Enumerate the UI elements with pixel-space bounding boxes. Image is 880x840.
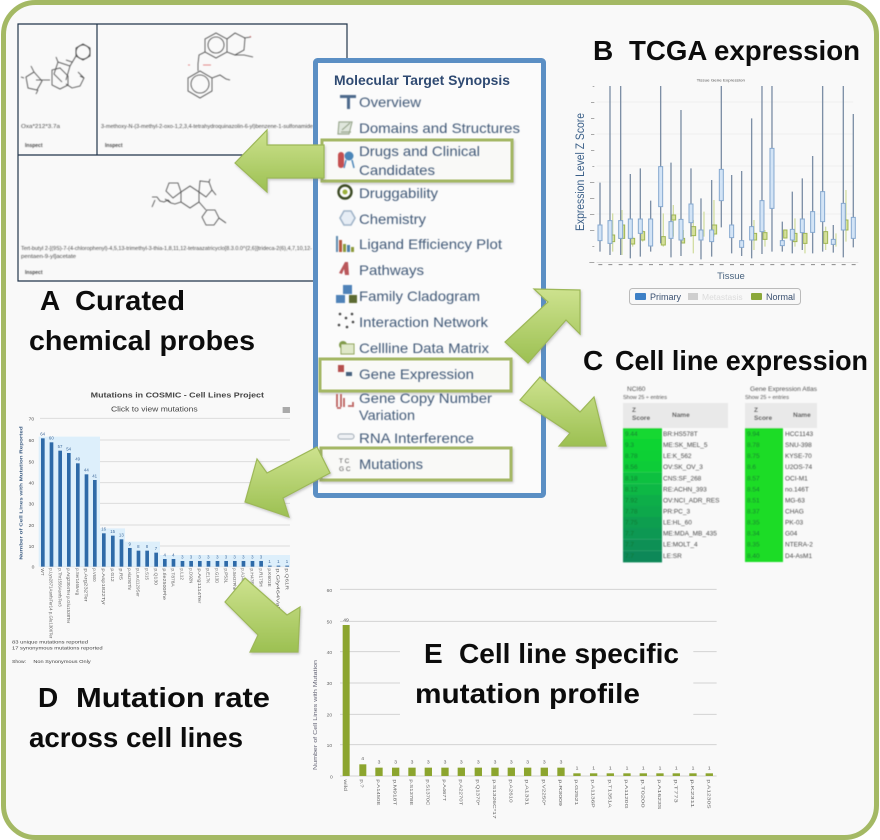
table two scores: 8.40: [747, 553, 760, 560]
label: D mutation rate across cell lines: D: [38, 682, 58, 713]
table one rows: CNS:SF_268: [663, 476, 702, 482]
table two header: Score: [754, 415, 772, 422]
x labels: p.A467T: [441, 779, 447, 801]
grid lines: [340, 589, 717, 776]
y axis labels: 60: [29, 438, 34, 444]
table one rows: ME:MDA_MB_435: [663, 530, 717, 538]
menu items: Family Cladogram: [359, 288, 480, 304]
table two score column: [745, 428, 783, 562]
chart title: Mutations in COSMIC - Cell Lines Project: [91, 391, 265, 400]
menu items: Domains and Structures: [359, 120, 520, 136]
icon: druggability: [338, 186, 352, 198]
table one rows: LE:HL_60: [663, 520, 692, 526]
table two scores: 9.94: [747, 431, 760, 438]
primary boxes: [598, 148, 855, 247]
bar values: 13: [119, 533, 124, 538]
label: A curated chemical probes: chemical probes: [29, 325, 255, 356]
y axis labels: 0: [330, 774, 333, 780]
bar values: 3: [560, 759, 563, 765]
bar values: 16: [101, 527, 107, 532]
icon: mutations: T C: [339, 458, 350, 465]
bar values: 8: [137, 544, 140, 549]
x labels: [39, 568, 289, 639]
primary whiskers: [600, 86, 853, 259]
highlight: mutations: [321, 448, 511, 480]
molecule three: [152, 179, 226, 225]
table two scores: 8.57: [747, 476, 760, 482]
x labels: p.Q61R: [283, 568, 289, 590]
menu items: Variation: [359, 407, 415, 423]
x labels: p.A2270T: [457, 779, 463, 805]
label: E cell line specific mutation profile: E: [424, 638, 443, 669]
bar values: 57: [58, 444, 63, 449]
label: E cell line specific mutation profile: mutation profile: [415, 678, 640, 709]
x labels: p.S1370C: [424, 779, 430, 806]
table one scores: 8.56: [625, 464, 638, 471]
bar values: 1: [592, 765, 595, 771]
table one header: Name: [672, 412, 690, 419]
table one heading: NCI60: [627, 386, 646, 393]
menu items: RNA Interference: [359, 430, 474, 446]
bar values: 41: [92, 473, 98, 478]
mutation counts: 17 synonymous mutations reported: [12, 646, 103, 652]
x labels: p.A1230S: [705, 779, 711, 810]
x labels: p.E17K: [205, 568, 211, 584]
table two controls: Show 25 ÷ entries: [745, 395, 789, 401]
menu items: [359, 94, 520, 472]
y axis title: Number of Cell Lines with Mutation Reported: [18, 426, 24, 560]
table one controls: Show 25 ÷ entries: [623, 395, 667, 401]
bar values: 1: [576, 765, 579, 771]
y axis labels: 10: [327, 743, 332, 749]
bar values: 54: [66, 446, 72, 451]
table two rows: D4-AsM1: [785, 553, 812, 560]
bar values: 49: [343, 617, 349, 623]
table one scores: 7.7: [625, 542, 634, 548]
icon: domains: [338, 122, 352, 134]
y axis labels: 50: [29, 460, 34, 466]
x labels: p.M918T: [392, 779, 398, 805]
mutation counts: 83 unique mutations reported: [12, 640, 88, 646]
x labels: p.V600: [91, 568, 97, 582]
bars: [343, 625, 713, 776]
table one scores: 8.18: [625, 476, 638, 482]
label: A curated chemical probes: A: [40, 285, 60, 316]
bar values: 3: [444, 759, 447, 765]
bar values: 3: [394, 759, 397, 765]
table two rows: SNU-398: [785, 442, 812, 449]
table one rows: OV:SK_OV_3: [663, 464, 703, 471]
menu box: [316, 60, 544, 496]
x labels: p.G13D: [214, 568, 220, 584]
label: C cell line expression: Cell line expression: [615, 345, 868, 376]
icon: gene copy number: [337, 394, 353, 408]
table one header: Score: [632, 415, 650, 422]
highlight: gene expression: [320, 359, 511, 391]
bar values: 3: [251, 554, 254, 559]
x labels: p.Q1370*: [474, 779, 480, 805]
x labels: p.Leu1129Ser: [135, 568, 141, 597]
x labels: p.R175H: [257, 568, 263, 587]
icon: ligand plot: [336, 236, 354, 252]
highlighted band: [39, 437, 290, 567]
bar values: 4: [172, 552, 175, 557]
x labels: p.Arg1114Ter: [196, 568, 202, 604]
menu icons: [336, 95, 357, 473]
icon: gene expression: [338, 365, 352, 376]
y axis labels: [29, 416, 35, 571]
table one scores: 8.12: [625, 486, 638, 494]
bar values: 1: [642, 765, 645, 771]
icon: chemistry: [340, 211, 355, 225]
bar values: 3: [216, 554, 219, 559]
x labels: WT: [39, 568, 45, 576]
grid lines: [40, 418, 290, 567]
compound captions: Inspect: [25, 270, 43, 276]
x labels: p.Lys2871AsnfsTer14 p.Glu1306Ter: [48, 568, 54, 639]
grid and axis: [597, 102, 858, 263]
x labels: p.K2311: [689, 779, 695, 808]
x labels: [342, 779, 711, 819]
table two rows: no.146T: [785, 486, 809, 494]
x labels: p.A146T: [240, 568, 246, 585]
bar values: 1: [609, 765, 612, 771]
table one rows: ME:SK_MEL_5: [663, 442, 708, 449]
x labels: p.Q130: [152, 568, 158, 585]
y axis labels: 30: [327, 681, 332, 687]
menu items: Gene Copy Number: [359, 390, 492, 406]
table one rows: BR:HS578T: [663, 431, 698, 438]
x labels: p.?: [359, 779, 365, 788]
x labels: wild: [342, 779, 348, 791]
panel borders: [18, 24, 347, 281]
molecule two: [188, 33, 253, 98]
table two header: [745, 403, 817, 428]
bar values: 3: [198, 554, 201, 559]
arrow: to cell line expression: [520, 377, 606, 446]
x labels: p.S1326C*17: [491, 779, 497, 819]
bar values: 3: [411, 759, 414, 765]
menu items: Ligand Efficiency Plot: [359, 236, 502, 252]
menu items: Cellline Data Matrix: [359, 340, 489, 356]
bar values: 1: [286, 559, 289, 564]
x labels: p.R5: [118, 568, 124, 580]
table two rows: OCI-M1: [785, 476, 808, 482]
compound captions: 3-methoxy-N-(3-methyl-2-oxo-1,2,3,4-tetrahydroquinazolin-6-yl)benzene-1-sulfonamide: [101, 124, 313, 130]
bar values: 3: [181, 554, 184, 559]
y axis labels: 40: [327, 650, 332, 656]
table two rows: PK-03: [785, 520, 803, 526]
bar values: 4: [163, 552, 166, 557]
x labels: p.R3009: [557, 779, 563, 806]
table one scores: 7.75: [625, 520, 638, 526]
panel: curated chemical probes: [18, 24, 347, 281]
table two rows: HCC1143: [785, 431, 813, 438]
table one scores: 7.7: [625, 553, 634, 560]
table two scores: 8.54: [747, 486, 760, 494]
y axis labels: 60: [327, 588, 332, 594]
x labels: p.S15: [143, 568, 149, 580]
label: D mutation rate across cell lines: Mutation rate: [76, 682, 270, 713]
compound captions: Tert-butyl 2-[(9S)-7-(4-chlorophenyl)-4,5,13-trimethyl-3-thia-1,8,11,12-tetraazatricyclo[8.3.0.0^{2,6}]trideca-2(6),4,7,10,12-: [21, 246, 312, 252]
table two rows: KYSE-70: [785, 453, 812, 460]
icon: overview: [340, 95, 356, 109]
x labels: p.L12: [179, 568, 185, 580]
menu items: Interaction Network: [359, 314, 489, 330]
highlight: drugs and clinical candidates: [322, 140, 512, 181]
bar values: 9: [128, 541, 131, 546]
menu items: Candidates: [359, 162, 435, 178]
x labels: p.V2250*: [540, 779, 546, 805]
bar values: 3: [510, 759, 513, 765]
menu items: Chemistry: [359, 211, 426, 227]
x labels: p.Arg2304Ter p.Glu1538Ter: [65, 568, 71, 624]
y axis labels: 10: [29, 544, 34, 550]
menu items: Drugs and Clinical: [359, 143, 480, 159]
table one rows: LE:SR: [663, 553, 682, 560]
label: C cell line expression: C: [583, 345, 603, 376]
bar values: 49: [75, 457, 81, 462]
label: B TCGA expression: TCGA expression: [629, 35, 860, 66]
legend: [630, 288, 800, 304]
chart subtitle: Click to view mutations: [111, 406, 198, 413]
icon: mutations: [339, 458, 351, 473]
chart title: Tissue Gene Expression: [697, 78, 745, 83]
menu items: Pathways: [359, 262, 424, 278]
y axis labels: 20: [327, 712, 332, 718]
x labels: p.Ala290Thr: [126, 568, 132, 590]
table two scores: 8.37: [747, 508, 760, 516]
bar values: 1: [708, 765, 711, 771]
x labels: p.Ser1465Arg: [74, 568, 80, 595]
x labels: p.Thr1556AsnfsTer3: [56, 568, 62, 607]
icon: cellline matrix: [339, 341, 354, 354]
x labels: p.T0200: [639, 779, 645, 808]
bar values: 4: [361, 756, 364, 762]
bars: [41, 438, 289, 567]
bar values: 3: [260, 554, 263, 559]
x labels: p.Gly464Val: [275, 568, 281, 608]
x labels: p.T1351A: [606, 779, 612, 809]
bar values: 3: [427, 759, 430, 765]
x labels: p.Ser37Phe: [231, 568, 237, 590]
compound captions: pentaen-9-yl]acetate: [21, 254, 76, 260]
table one rows: PR:PC_3: [663, 508, 690, 516]
label: A curated chemical probes: [29, 285, 255, 356]
chart: cell line specific mutation profile: [327, 588, 717, 819]
bar values: 1: [692, 765, 695, 771]
table two scores: 8.35: [747, 542, 760, 548]
x labels: p.D92N: [187, 568, 193, 584]
bar values: 3: [460, 759, 463, 765]
icon: pathways: [339, 262, 349, 275]
x labels: p.T773: [672, 779, 678, 803]
table one score column: [623, 428, 662, 562]
table one rows: LE:MOLT_4: [663, 542, 698, 548]
table two rows: U2OS-74: [785, 464, 812, 471]
menu items: Overview: [359, 94, 422, 110]
bar values: 1: [675, 765, 678, 771]
x labels: p.T878A: [170, 568, 176, 587]
icon: mutations: G C: [339, 466, 351, 473]
table two scores: 8.6: [747, 464, 756, 471]
x labels: p.Ile2500Phe: [161, 568, 167, 600]
table two header: Name: [793, 412, 811, 419]
chart: TCGA expression boxplot: [589, 78, 858, 265]
bar values: 3: [207, 554, 210, 559]
bar values: 3: [190, 554, 193, 559]
compound captions: [21, 124, 313, 276]
x labels: p.A1331: [524, 779, 530, 806]
mutation counts: Show:: [12, 659, 26, 665]
mutation counts: Non Synonymous Only: [33, 659, 91, 665]
arrow: to TCGA expression: [505, 289, 580, 363]
x labels: p.P53L: [222, 568, 228, 584]
table two rows: [785, 431, 813, 560]
icon: rna interference: [338, 434, 354, 439]
label: E cell line specific mutation profile: [415, 638, 679, 709]
bar values: 1: [268, 559, 271, 564]
x labels: p.S1378E: [408, 779, 414, 806]
bar values: 1: [626, 765, 629, 771]
label: B TCGA expression: B: [593, 35, 613, 66]
table two scores: 8.34: [747, 530, 760, 538]
table one header: [623, 403, 728, 428]
arrow: to mutation rate: [245, 447, 330, 517]
bar values: 7: [155, 546, 158, 551]
molecule one: [21, 44, 90, 94]
x labels: p.A2610: [507, 779, 513, 803]
table two rows: G04: [785, 530, 798, 538]
y-axis label: Expression Level Z Score: [575, 113, 587, 231]
mutation counts: [12, 640, 103, 665]
x tick labels: [598, 263, 856, 266]
x labels: p.G12: [109, 568, 115, 582]
table two scores: 8.78: [747, 442, 760, 449]
table two rows: CHAG: [785, 508, 804, 516]
legend: Metastasis: [702, 292, 743, 302]
bar values: 64: [40, 432, 46, 437]
label: D mutation rate across cell lines: across cell lines: [29, 722, 243, 753]
bar values: 3: [526, 759, 529, 765]
table one header: Z: [632, 407, 636, 414]
table two scores: 8.75: [747, 453, 760, 460]
icon: interaction network: [338, 313, 354, 328]
x labels: p.Asp1822Tyr: [100, 568, 106, 605]
bar values: 15: [110, 529, 116, 534]
table two scores: [747, 431, 760, 560]
menu items: Gene Expression: [359, 366, 474, 382]
y axis labels: 20: [29, 523, 34, 529]
table one scores: 7.7: [625, 530, 634, 538]
bar values: 44: [84, 468, 89, 473]
table two rows: MG-63: [785, 498, 805, 504]
table one scores: 7.78: [625, 508, 638, 516]
label: E cell line specific mutation profile: Cell line specific: [459, 638, 679, 669]
table one rows: OV:NCI_ADR_RES: [663, 498, 720, 504]
x labels: p.A1120G: [623, 779, 629, 809]
y axis labels: 40: [29, 481, 34, 487]
table one rows: [663, 431, 720, 560]
table two scores: 8.35: [747, 520, 760, 526]
icon: family cladogram: [336, 285, 357, 303]
y axis labels: 50: [327, 619, 332, 625]
x-axis label: Tissue: [717, 271, 745, 282]
bar values: [40, 432, 289, 564]
bar values: 1: [659, 765, 662, 771]
bar values: 3: [543, 759, 546, 765]
y axis labels: 30: [29, 501, 34, 507]
bar values: 60: [49, 436, 54, 441]
bar values: 1: [277, 559, 280, 564]
tick marks: [589, 86, 594, 262]
normal whiskers: [613, 190, 846, 255]
bar values: [343, 617, 711, 771]
table two scores: 8.51: [747, 498, 760, 504]
bar values: 8: [146, 544, 149, 549]
x labels: p.A1623S: [656, 779, 662, 810]
menu title: Molecular Target Synopsis: [334, 73, 510, 88]
x labels: p.K601E: [266, 568, 272, 587]
table one scores: 7.92: [625, 498, 638, 504]
bar values: 3: [225, 554, 228, 559]
table two header: Z: [754, 407, 758, 414]
panel: cell line expression tables: [623, 386, 818, 562]
table one scores: 8.78: [625, 453, 638, 460]
arrow: to curated probes: [235, 130, 324, 192]
y axis labels: 70: [29, 416, 34, 422]
table two rows: NTERA-2: [785, 542, 813, 548]
menu items: Mutations: [359, 456, 423, 472]
bar values: 3: [494, 759, 497, 765]
arrow: to mutation profile: [225, 578, 300, 652]
y axis title: chart E: Number of Cell Lines with Mutation: [313, 660, 319, 770]
compound captions: Oxa*212*3.7a: [21, 124, 60, 130]
bar values: 3: [378, 759, 381, 765]
compound captions: Inspect: [25, 143, 43, 149]
label: D mutation rate across cell lines: [29, 682, 270, 753]
compound captions: Inspect: [105, 143, 123, 149]
y axis labels: [327, 588, 333, 780]
label: A curated chemical probes: Curated: [75, 285, 185, 316]
icon: drugs: [338, 152, 354, 168]
table two heading: Gene Expression Atlas: [750, 386, 818, 393]
x labels: p.A1136P: [590, 779, 596, 809]
table one rows: RE:ACHN_393: [663, 486, 707, 494]
bar values: 3: [477, 759, 480, 765]
bar values: 3: [233, 554, 236, 559]
legend: Primary: [650, 292, 681, 302]
y axis labels: 0: [32, 565, 35, 571]
table one rows: LE:K_562: [663, 453, 692, 460]
menu items: Druggability: [359, 185, 438, 201]
x labels: p.A1450E: [375, 779, 381, 806]
x labels: p.G2521: [573, 779, 579, 806]
legend: Normal: [766, 292, 795, 302]
table one scores: [625, 431, 638, 560]
table one scores: 9.44: [625, 431, 638, 438]
icon: export: [283, 407, 290, 413]
x labels: p.H47R: [249, 568, 255, 585]
panel: molecular target synopsis menu: [316, 60, 544, 496]
x labels: p.Arg232Ter: [83, 568, 89, 602]
bar values: 3: [242, 554, 245, 559]
chart: mutations in COSMIC cell lines: [12, 391, 290, 665]
table one scores: 9.3: [625, 442, 634, 449]
normal boxes: [611, 215, 848, 245]
